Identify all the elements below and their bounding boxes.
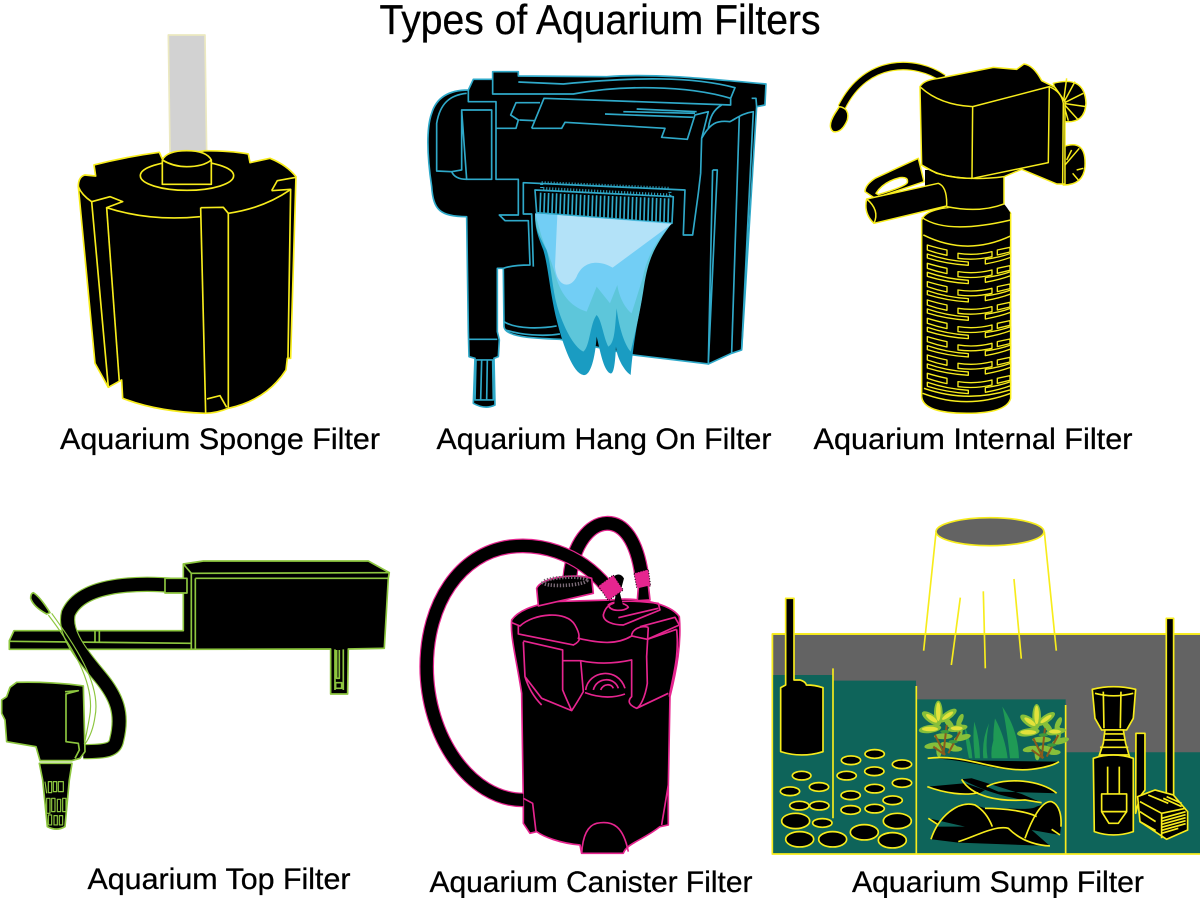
filter cartridge — [922, 206, 1011, 413]
outlines — [927, 758, 1061, 846]
valve knob — [613, 575, 624, 607]
body details — [437, 79, 757, 400]
spout — [162, 151, 211, 184]
label: internal: Aquarium Internal Filter — [814, 423, 1133, 456]
rock fills — [928, 802, 1061, 846]
tank lines — [772, 634, 1200, 854]
neck — [925, 170, 1011, 213]
right plant — [1017, 704, 1070, 760]
top box — [9, 561, 389, 694]
sponge body — [78, 151, 296, 413]
slats — [927, 245, 1011, 394]
sponge details — [78, 161, 296, 413]
clip — [865, 158, 924, 198]
protein skimmer — [1092, 687, 1136, 835]
label: top: Aquarium Top Filter — [88, 863, 351, 896]
panel: sponge filter — [78, 35, 296, 413]
rocks and driftwood — [927, 757, 1061, 846]
light rays — [924, 532, 1056, 668]
spout — [866, 183, 947, 223]
grasses — [965, 707, 1019, 758]
tank background — [772, 634, 1200, 854]
pump head — [920, 64, 1065, 184]
panel: hang on filter — [428, 72, 766, 407]
intake head — [537, 576, 593, 606]
canister details — [512, 601, 679, 853]
panel: sump filter — [772, 518, 1200, 854]
canister body — [511, 599, 680, 853]
water middle — [917, 699, 1066, 854]
pump body — [2, 682, 85, 761]
water left — [772, 675, 916, 854]
plants — [918, 701, 1070, 760]
air wire — [48, 613, 96, 744]
pump pipe — [1136, 733, 1145, 813]
return pipe — [1166, 618, 1174, 795]
driftwood fills — [927, 757, 1059, 803]
power head pump — [1138, 790, 1188, 839]
cartridge lines — [922, 177, 1011, 402]
panel: internal filter — [830, 64, 1086, 413]
back hose — [570, 523, 642, 577]
connectors — [598, 575, 623, 601]
panel: canister filter — [427, 523, 680, 853]
panel: top filter — [2, 561, 389, 829]
strainer — [39, 763, 72, 829]
hose coupling — [165, 578, 187, 593]
water right — [1067, 752, 1200, 854]
sponge filter in sump — [781, 598, 823, 755]
label: sponge: Aquarium Sponge Filter — [60, 423, 380, 456]
left plant — [918, 701, 971, 757]
filter body — [428, 72, 766, 407]
air tip — [31, 593, 50, 614]
air tube tip — [830, 107, 848, 132]
water flow — [535, 213, 672, 375]
knobs — [1053, 78, 1086, 185]
air tube — [842, 66, 943, 107]
tube — [168, 35, 207, 153]
media stones — [780, 750, 912, 848]
side hose — [427, 546, 607, 800]
hose — [68, 584, 177, 752]
label: hang on: Aquarium Hang On Filter — [436, 423, 772, 456]
lamp — [936, 518, 1044, 546]
